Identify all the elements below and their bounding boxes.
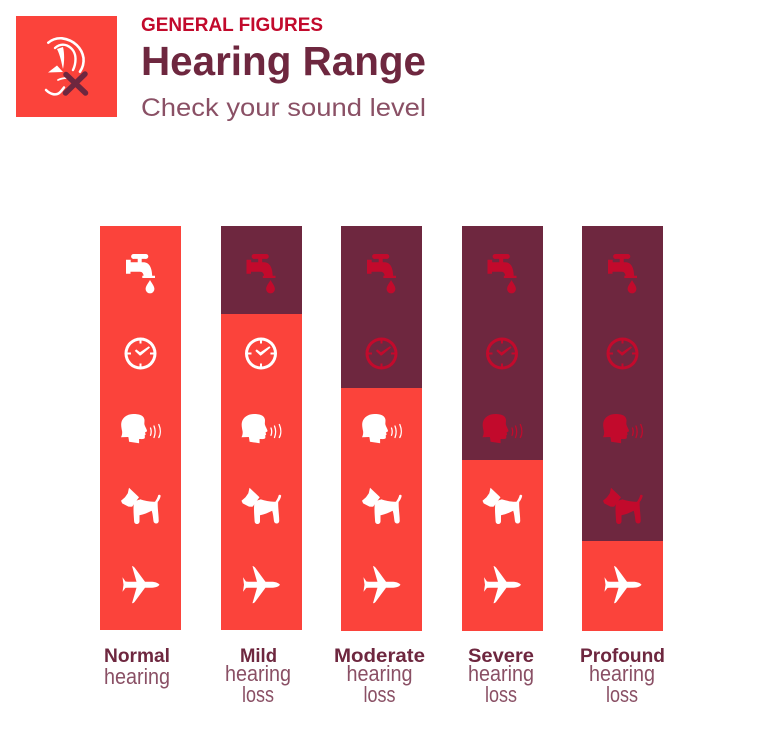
lost range bbox=[462, 226, 543, 460]
label: loss bbox=[364, 682, 396, 707]
title: Hearing Range bbox=[141, 38, 426, 84]
header icon: ear with cross bbox=[16, 16, 117, 117]
label: hearing bbox=[589, 661, 655, 686]
label: loss bbox=[485, 682, 517, 707]
column: Mild hearing loss bbox=[221, 226, 302, 707]
label: loss bbox=[606, 682, 638, 707]
column: Severe hearing loss bbox=[462, 226, 543, 707]
cross bbox=[66, 74, 86, 93]
label bbox=[580, 646, 665, 707]
eyebrow heading: GENERAL FIGURES bbox=[141, 15, 323, 36]
lost range bbox=[341, 226, 422, 388]
bar level bbox=[341, 226, 422, 631]
lost range bbox=[221, 226, 302, 314]
label: Mild bbox=[240, 646, 277, 667]
label: Severe bbox=[468, 646, 534, 667]
column: Profound hearing loss bbox=[580, 226, 665, 707]
label: hearing bbox=[225, 661, 291, 686]
label: hearing bbox=[346, 661, 412, 686]
label: Profound bbox=[580, 646, 665, 667]
label: Normal bbox=[104, 646, 170, 667]
column: Normal hearing bbox=[100, 226, 181, 689]
label bbox=[468, 646, 534, 707]
label: hearing bbox=[468, 661, 534, 686]
subtitle: Check your sound level bbox=[141, 94, 426, 122]
bar level bbox=[582, 226, 663, 631]
icons bbox=[121, 254, 161, 603]
bar level bbox=[221, 226, 302, 630]
label bbox=[334, 646, 425, 707]
ear bbox=[46, 38, 84, 94]
label bbox=[104, 646, 170, 689]
bar level bbox=[462, 226, 543, 631]
label: hearing bbox=[104, 664, 170, 689]
icon background square bbox=[16, 16, 117, 117]
icons bbox=[242, 254, 281, 603]
label: Moderate bbox=[334, 646, 425, 667]
lost range bbox=[582, 226, 663, 541]
bar bbox=[100, 226, 181, 630]
icons bbox=[603, 254, 643, 603]
column: Moderate hearing loss bbox=[334, 226, 425, 707]
icons bbox=[362, 254, 402, 603]
label: loss bbox=[242, 682, 274, 707]
icons bbox=[482, 254, 522, 603]
label bbox=[225, 646, 291, 707]
